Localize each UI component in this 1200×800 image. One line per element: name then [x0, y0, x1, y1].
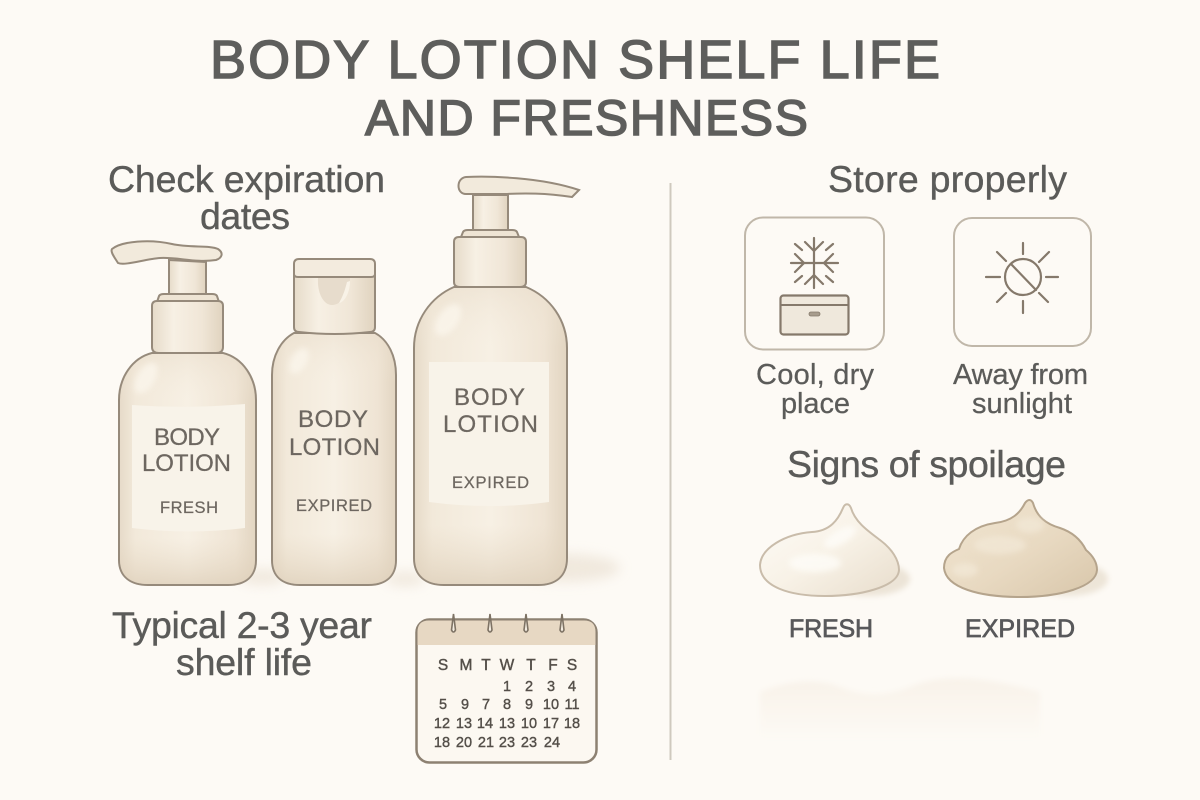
decorative faint mound — [760, 678, 1040, 740]
bottle: expired flip cap — [272, 259, 396, 585]
body — [414, 287, 567, 585]
weekdays: W — [500, 657, 515, 674]
label: place — [781, 388, 850, 420]
dates: 8 — [503, 697, 511, 713]
dates: 9 — [461, 697, 469, 713]
dates: 9 — [525, 697, 533, 713]
icon: drawer — [780, 296, 848, 334]
dates: 2 — [525, 679, 533, 695]
text: typical shelf life: shelf life — [176, 641, 312, 683]
heading: store properly: Store properly — [828, 158, 1067, 200]
bottle: expired large pump — [414, 177, 579, 585]
icon: snowflake — [791, 238, 838, 288]
label — [756, 359, 874, 420]
dates: 14 — [477, 716, 493, 732]
lotion swatch: fresh — [760, 504, 910, 643]
bottle: expired large pump: EXPIRED — [452, 474, 529, 492]
dates: 11 — [564, 697, 580, 713]
bottle: expired flip cap: BODY — [298, 406, 368, 433]
dates: 21 — [478, 735, 494, 751]
bottle: expired large pump: BODY — [454, 384, 525, 411]
bottle: expired flip cap: LOTION — [289, 434, 380, 461]
dates: 18 — [434, 735, 450, 751]
bottle: fresh pump — [112, 241, 256, 585]
text: typical shelf life — [112, 604, 372, 683]
weekdays: T — [526, 657, 536, 674]
dates: 1 — [503, 679, 511, 695]
heading: check expiration dates: dates — [200, 195, 290, 237]
dates: 20 — [456, 735, 472, 751]
heading: check expiration dates — [108, 158, 385, 237]
pump head — [473, 195, 508, 232]
dates: 10 — [521, 716, 537, 732]
label — [429, 362, 549, 506]
label — [953, 359, 1088, 420]
dates: 7 — [482, 697, 490, 713]
dates: 18 — [564, 716, 580, 732]
dates: 23 — [499, 735, 515, 751]
icon card: cool dry place — [745, 218, 884, 420]
heading: check expiration dates: Check expiration — [108, 158, 385, 200]
weekdays — [438, 657, 577, 674]
label: Away from — [953, 359, 1088, 391]
weekdays: F — [548, 657, 558, 674]
collar — [152, 301, 223, 353]
dates: 12 — [434, 716, 450, 732]
label: Cool, dry — [756, 359, 874, 391]
calendar — [416, 614, 596, 762]
dates: 13 — [499, 716, 515, 732]
dates: 24 — [544, 735, 560, 751]
dates: 13 — [456, 716, 472, 732]
weekdays: M — [460, 657, 472, 674]
dates: 23 — [521, 735, 537, 751]
heading: signs of spoilage: Signs of spoilage — [787, 443, 1066, 485]
title: AND FRESHNESS — [365, 90, 808, 146]
shadow: bottles — [238, 554, 620, 586]
label — [132, 404, 245, 532]
dates — [434, 679, 580, 751]
label: FRESH — [789, 615, 873, 643]
bottle: fresh pump: BODY — [154, 424, 220, 451]
collar — [454, 237, 526, 287]
dates: 4 — [568, 679, 576, 695]
weekdays: S — [567, 657, 577, 674]
label: EXPIRED — [965, 615, 1075, 643]
weekdays: S — [438, 657, 448, 674]
bottle: expired flip cap: EXPIRED — [296, 497, 372, 515]
bottle: fresh pump: LOTION — [142, 450, 231, 477]
bottle: expired large pump: LOTION — [443, 411, 538, 438]
label: sunlight — [972, 388, 1072, 420]
icon: crossed sun — [986, 243, 1058, 313]
title: BODY LOTION SHELF LIFE — [210, 30, 940, 90]
cap — [294, 274, 375, 334]
dates: 17 — [543, 716, 559, 732]
pump head — [169, 260, 206, 297]
lotion swatch: expired — [944, 500, 1108, 643]
title — [210, 30, 940, 146]
dates: 3 — [547, 679, 555, 695]
body — [272, 333, 396, 585]
weekdays: T — [481, 657, 491, 674]
icon card: away from sunlight — [953, 218, 1091, 420]
dates: 5 — [439, 697, 447, 713]
bottle: fresh pump: FRESH — [160, 499, 218, 517]
text: typical shelf life: Typical 2-3 year — [112, 604, 372, 646]
dates: 10 — [543, 697, 559, 713]
body — [119, 353, 256, 585]
